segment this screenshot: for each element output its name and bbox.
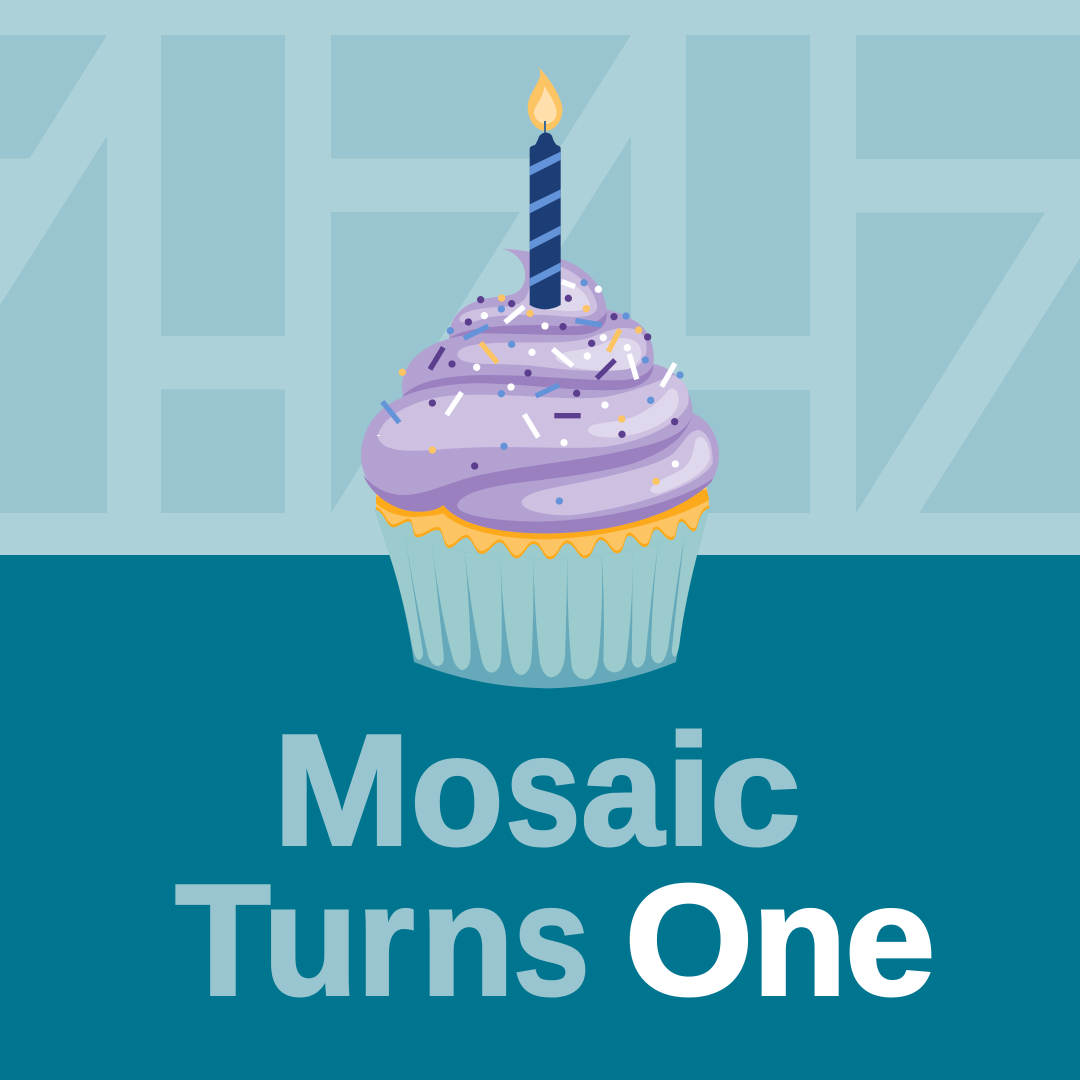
- icon: birthday cupcake with candle: [361, 66, 719, 688]
- title line 1: i: [666, 702, 712, 878]
- title line 2: s: [513, 852, 590, 1028]
- title highlight word: e: [845, 852, 935, 1028]
- background: mosaic pattern panel: [0, 0, 1080, 556]
- candle flame: [528, 66, 563, 134]
- candle stripes: [530, 152, 561, 287]
- title line 2: u: [263, 852, 358, 1028]
- title line 2: T: [175, 852, 271, 1028]
- cupcake wrapper: [375, 508, 709, 688]
- title line 1: o: [410, 702, 504, 878]
- icon: candle: [528, 66, 563, 309]
- title line 2: n: [420, 852, 514, 1028]
- candle body: [530, 133, 561, 309]
- title highlight word: O: [624, 852, 754, 1028]
- cake with scalloped edge: [376, 487, 709, 559]
- sprinkles: [377, 279, 684, 505]
- frosting swirl: [361, 249, 719, 533]
- title line 2: r: [357, 852, 415, 1028]
- title line 1: c: [710, 702, 801, 878]
- title line 1: M: [273, 702, 411, 878]
- title line 1: a: [581, 702, 665, 878]
- title highlight word: n: [752, 852, 847, 1028]
- title: [175, 702, 935, 1028]
- title line 1: s: [505, 702, 581, 878]
- background: teal lower band: [0, 555, 1080, 1080]
